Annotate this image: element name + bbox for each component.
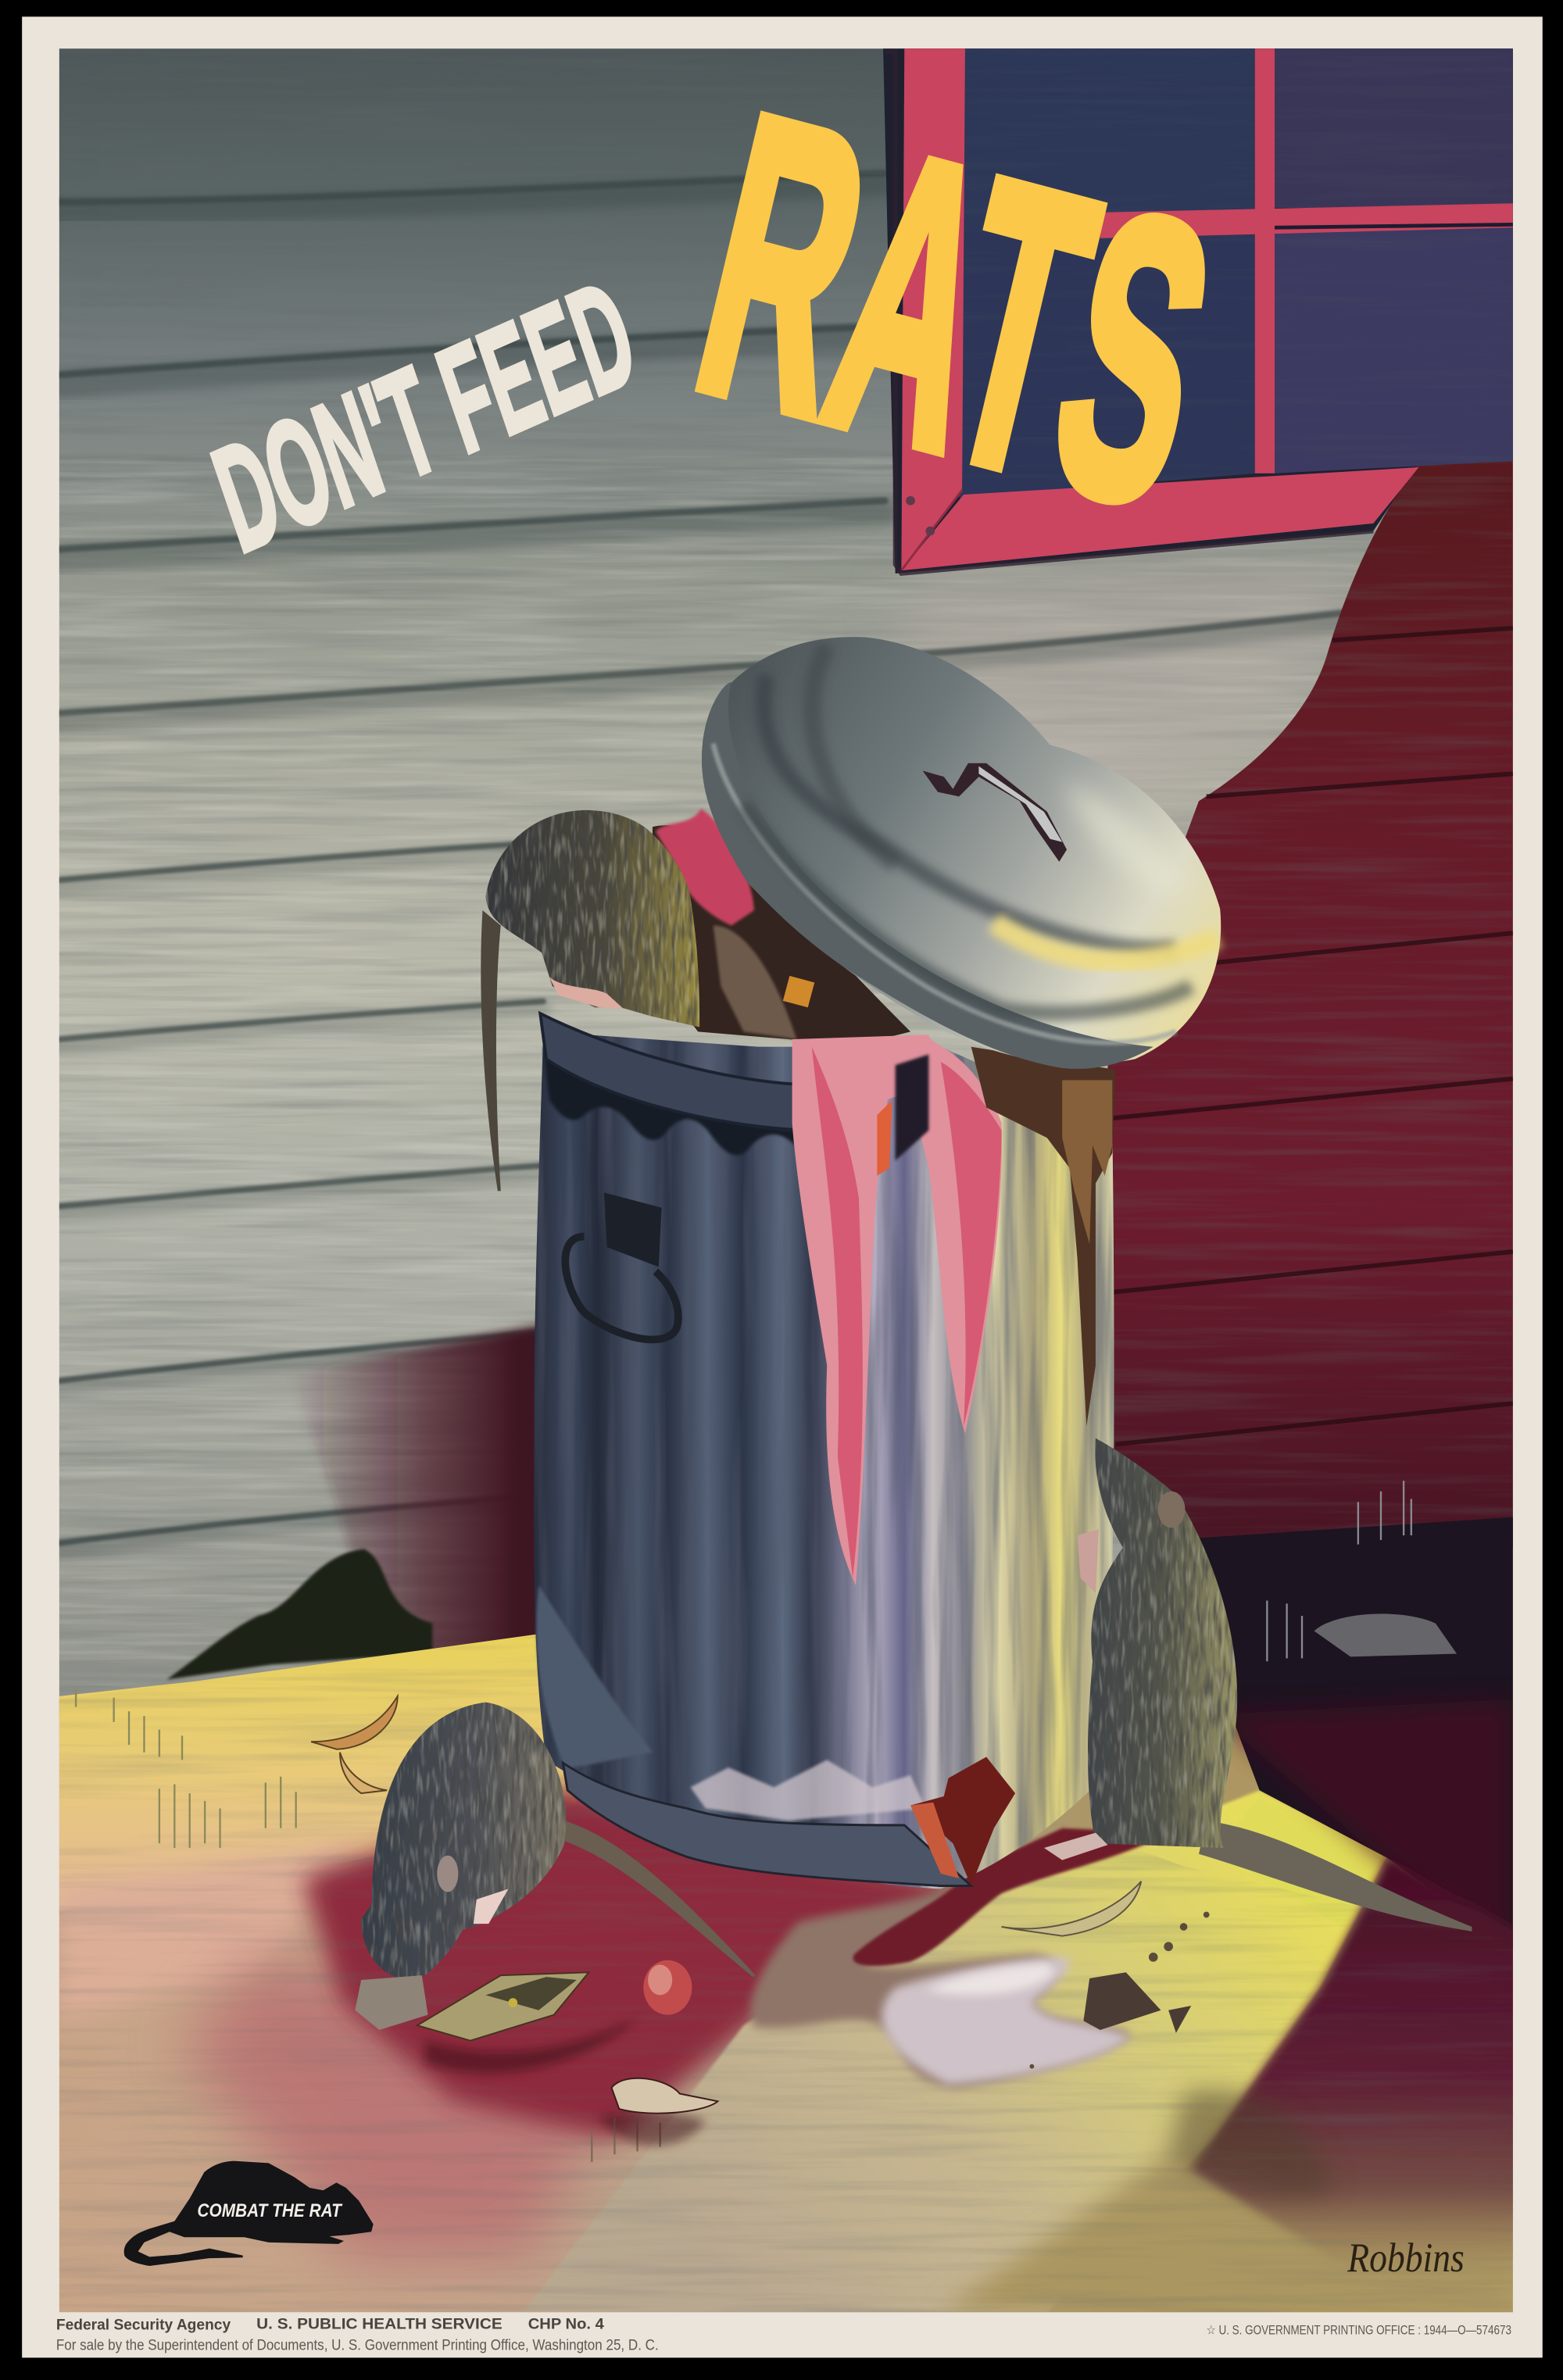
panel: red window <box>883 48 1513 574</box>
can body <box>534 1031 1114 1889</box>
trash scraps <box>1002 1881 1141 1936</box>
window panes <box>959 48 1257 234</box>
ear <box>437 1856 458 1892</box>
brown drips <box>971 1047 1115 1426</box>
footer credits: Federal Security Agency <box>56 2317 231 2334</box>
lid <box>702 637 1221 1069</box>
spilled red liquid <box>853 1828 1168 1966</box>
icon: Combat the Rat emblem <box>124 2161 374 2266</box>
handle <box>565 1192 678 1339</box>
dark arches below rim <box>543 1047 812 1168</box>
footer credits: U. S. PUBLIC HEALTH SERVICE <box>256 2316 503 2333</box>
panel: garbage can <box>534 637 1221 1889</box>
red shadow on ground <box>303 1787 971 2139</box>
lid handle <box>923 763 1067 862</box>
ear <box>1158 1492 1186 1528</box>
sunlit beam <box>524 1790 1389 2312</box>
title: RATS: RATS <box>668 32 1244 591</box>
bottom hoop <box>563 1763 971 1886</box>
tail <box>481 910 501 1191</box>
lower right olive blend <box>941 2154 1513 2321</box>
scraps on ground <box>311 1696 398 1749</box>
title: DON'T FEED: DON'T FEED <box>196 248 653 584</box>
rat eating on the ground <box>355 1703 756 2030</box>
emblem text: COMBAT THE RAT <box>197 2200 343 2221</box>
panel: ground <box>59 1481 1525 2321</box>
footer credits: For sale by the Superintendent of Documents, U. S. Government Printing Office, Washington 25, D. C. <box>56 2337 659 2354</box>
footer credits <box>56 2316 659 2354</box>
wall shadow on siding and foundation hole <box>167 1323 554 1680</box>
rat climbing can <box>1044 1438 1472 1932</box>
artist signature: Robbins <box>1347 2235 1465 2281</box>
pale strip <box>59 1843 364 2018</box>
right maroon shadow <box>1191 1857 1525 2291</box>
pink paper drips <box>792 1035 1002 1585</box>
torn rust hole <box>910 1757 1015 1886</box>
panel: clapboard siding <box>59 48 1516 1717</box>
top rim <box>540 1013 804 1131</box>
ground streaks <box>59 1635 1513 2321</box>
soft pink fade of shadow <box>182 1957 638 2260</box>
sunlit yellow ground on the left <box>59 1634 577 1912</box>
torn metal at base <box>690 1760 925 1821</box>
garbage spilling from top <box>653 825 910 1047</box>
tail <box>559 1821 756 1977</box>
panel: red neighbouring wall <box>1107 459 1513 1548</box>
footer credits: CHP No. 4 <box>528 2316 604 2333</box>
rat on rim of can <box>481 810 699 1191</box>
window frame <box>901 48 965 570</box>
milk puddle <box>750 1881 1131 2088</box>
dark yard shadow <box>1168 1517 1513 1949</box>
grass tufts <box>76 1689 660 2162</box>
tail <box>1199 1821 1472 1932</box>
